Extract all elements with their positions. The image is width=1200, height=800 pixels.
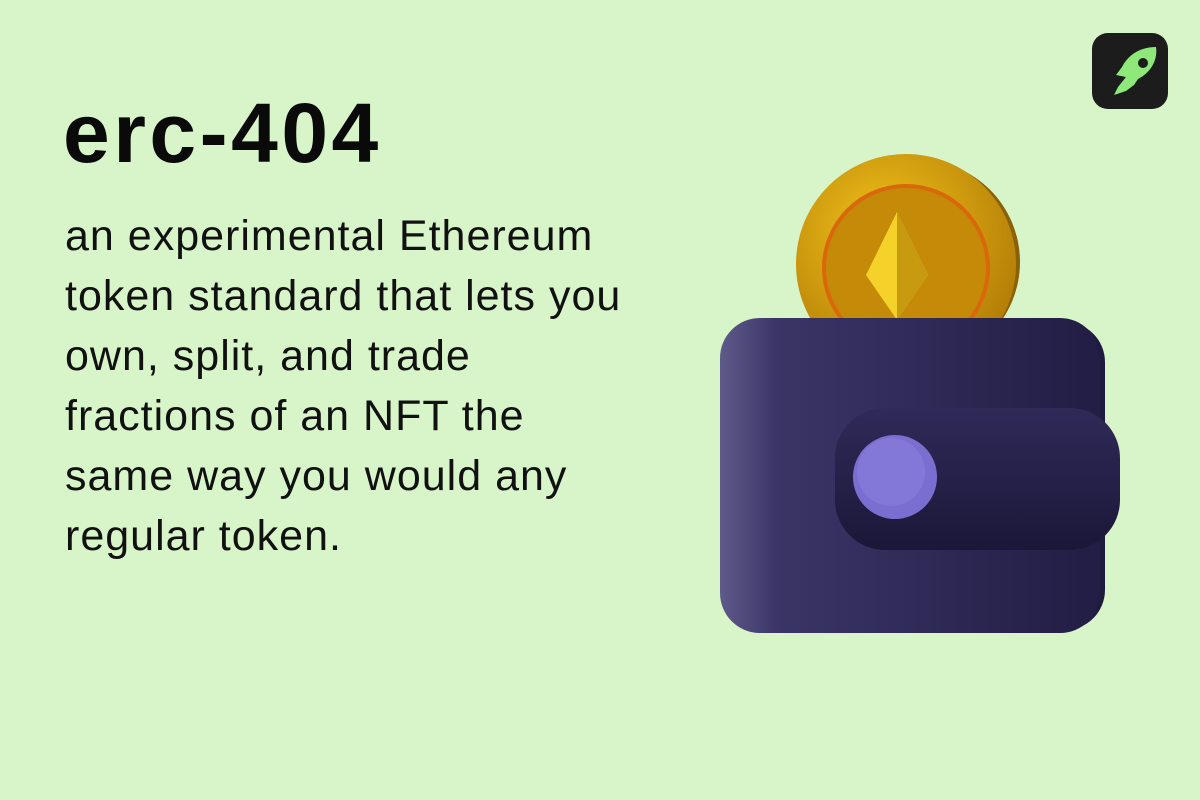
text block: description: an experimental Ethereum [65, 212, 593, 260]
wallet body [720, 318, 1120, 633]
text block: description: fractions of an NFT the [65, 392, 525, 440]
title: erc-404 [63, 86, 382, 180]
text block: description: own, split, and trade [65, 332, 471, 380]
strap [835, 408, 1120, 550]
icon: rocket logo [1092, 33, 1168, 109]
text block: description [65, 212, 621, 560]
text block: description: same way you would any [65, 452, 567, 500]
text block: description: token standard that lets you [65, 272, 621, 320]
coin [796, 154, 1020, 374]
button [853, 435, 937, 519]
illustration: wallet with ethereum coin [720, 154, 1120, 633]
text block: description: regular token. [65, 512, 342, 560]
